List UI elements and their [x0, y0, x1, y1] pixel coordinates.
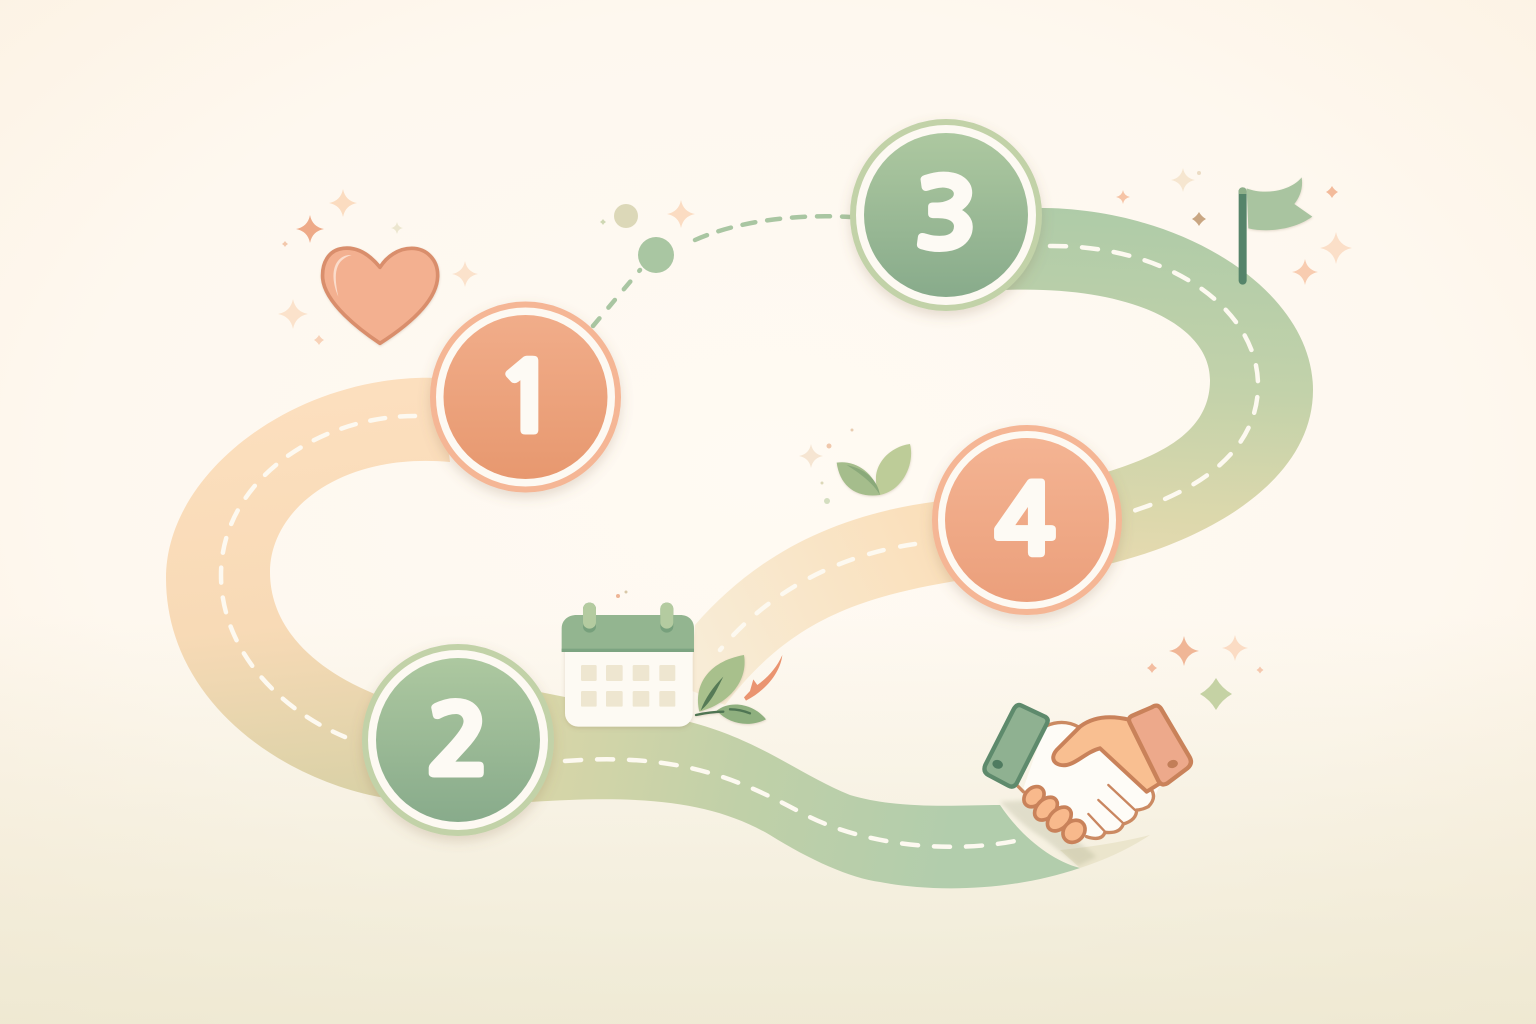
sparkles near handshake — [1147, 635, 1264, 710]
calendar date cells — [581, 665, 675, 707]
step 1 badge: 1 — [495, 351, 559, 446]
sparkles near leaves — [799, 428, 854, 504]
fist fingers — [1020, 783, 1090, 847]
calendar rings — [583, 603, 673, 633]
small dots near calendar — [616, 590, 628, 598]
icon: leaves near step 4 — [837, 444, 911, 496]
sparkles around heart — [278, 189, 478, 345]
icon: flag — [1239, 177, 1312, 285]
white hand — [1023, 722, 1160, 839]
dashed path from step 1 to step 3 — [593, 216, 850, 326]
road: from step 1 to step 2 — [166, 378, 450, 798]
icon: handshake — [984, 705, 1191, 866]
step 4 badge: 4 — [994, 473, 1056, 569]
sparkles around dashed path — [600, 200, 695, 228]
icon: leaf sprig by calendar — [696, 655, 766, 724]
road: from step 3 to step 4 — [1005, 208, 1313, 565]
step 4 badge — [935, 428, 1119, 612]
step 2 badge: 2 — [426, 694, 490, 789]
peach hand — [1053, 717, 1160, 792]
coral brush accent — [744, 655, 782, 701]
icon: heart — [323, 248, 438, 343]
road: from step 2 to handshake — [530, 690, 1080, 888]
green cuff — [984, 705, 1048, 787]
road: from step 4 toward calendar — [690, 498, 975, 705]
icon: calendar — [562, 603, 694, 727]
sparkles around flag — [1116, 168, 1352, 285]
coral cuff — [1129, 706, 1191, 785]
calendar header — [562, 615, 694, 652]
step 3 badge — [853, 122, 1039, 308]
waypoint dots — [614, 204, 674, 273]
paper cut-out behind hands — [1000, 800, 1097, 866]
step 1 badge — [433, 304, 618, 490]
calendar body — [565, 620, 693, 727]
step 2 badge — [365, 647, 551, 833]
pale road tail under handshake — [1060, 835, 1150, 868]
step 3 badge: 3 — [914, 168, 978, 263]
